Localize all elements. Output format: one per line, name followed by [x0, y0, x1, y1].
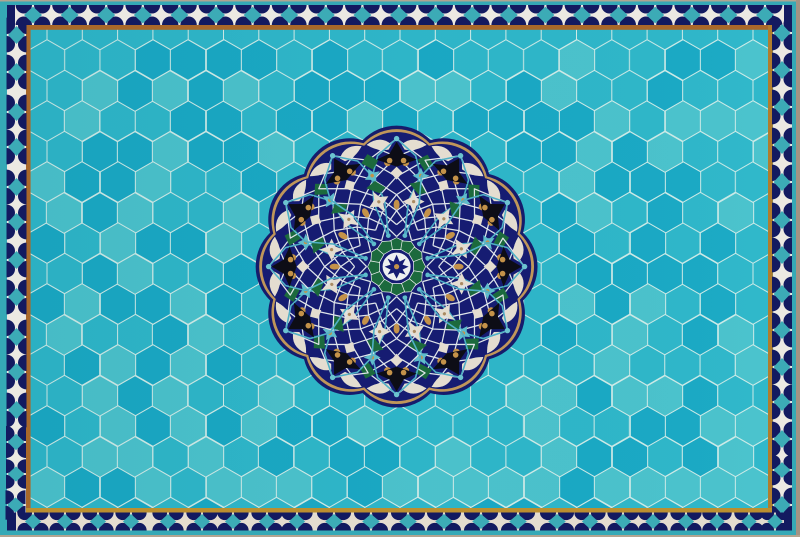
centre star [383, 253, 411, 281]
left mosaic star band [6, 18, 26, 520]
bottom mosaic star band [7, 512, 792, 530]
top mosaic star band [7, 5, 792, 25]
central mosaic medallion [256, 126, 538, 408]
twelve-fold interlace pattern [265, 135, 528, 398]
right mosaic star band [772, 16, 792, 522]
